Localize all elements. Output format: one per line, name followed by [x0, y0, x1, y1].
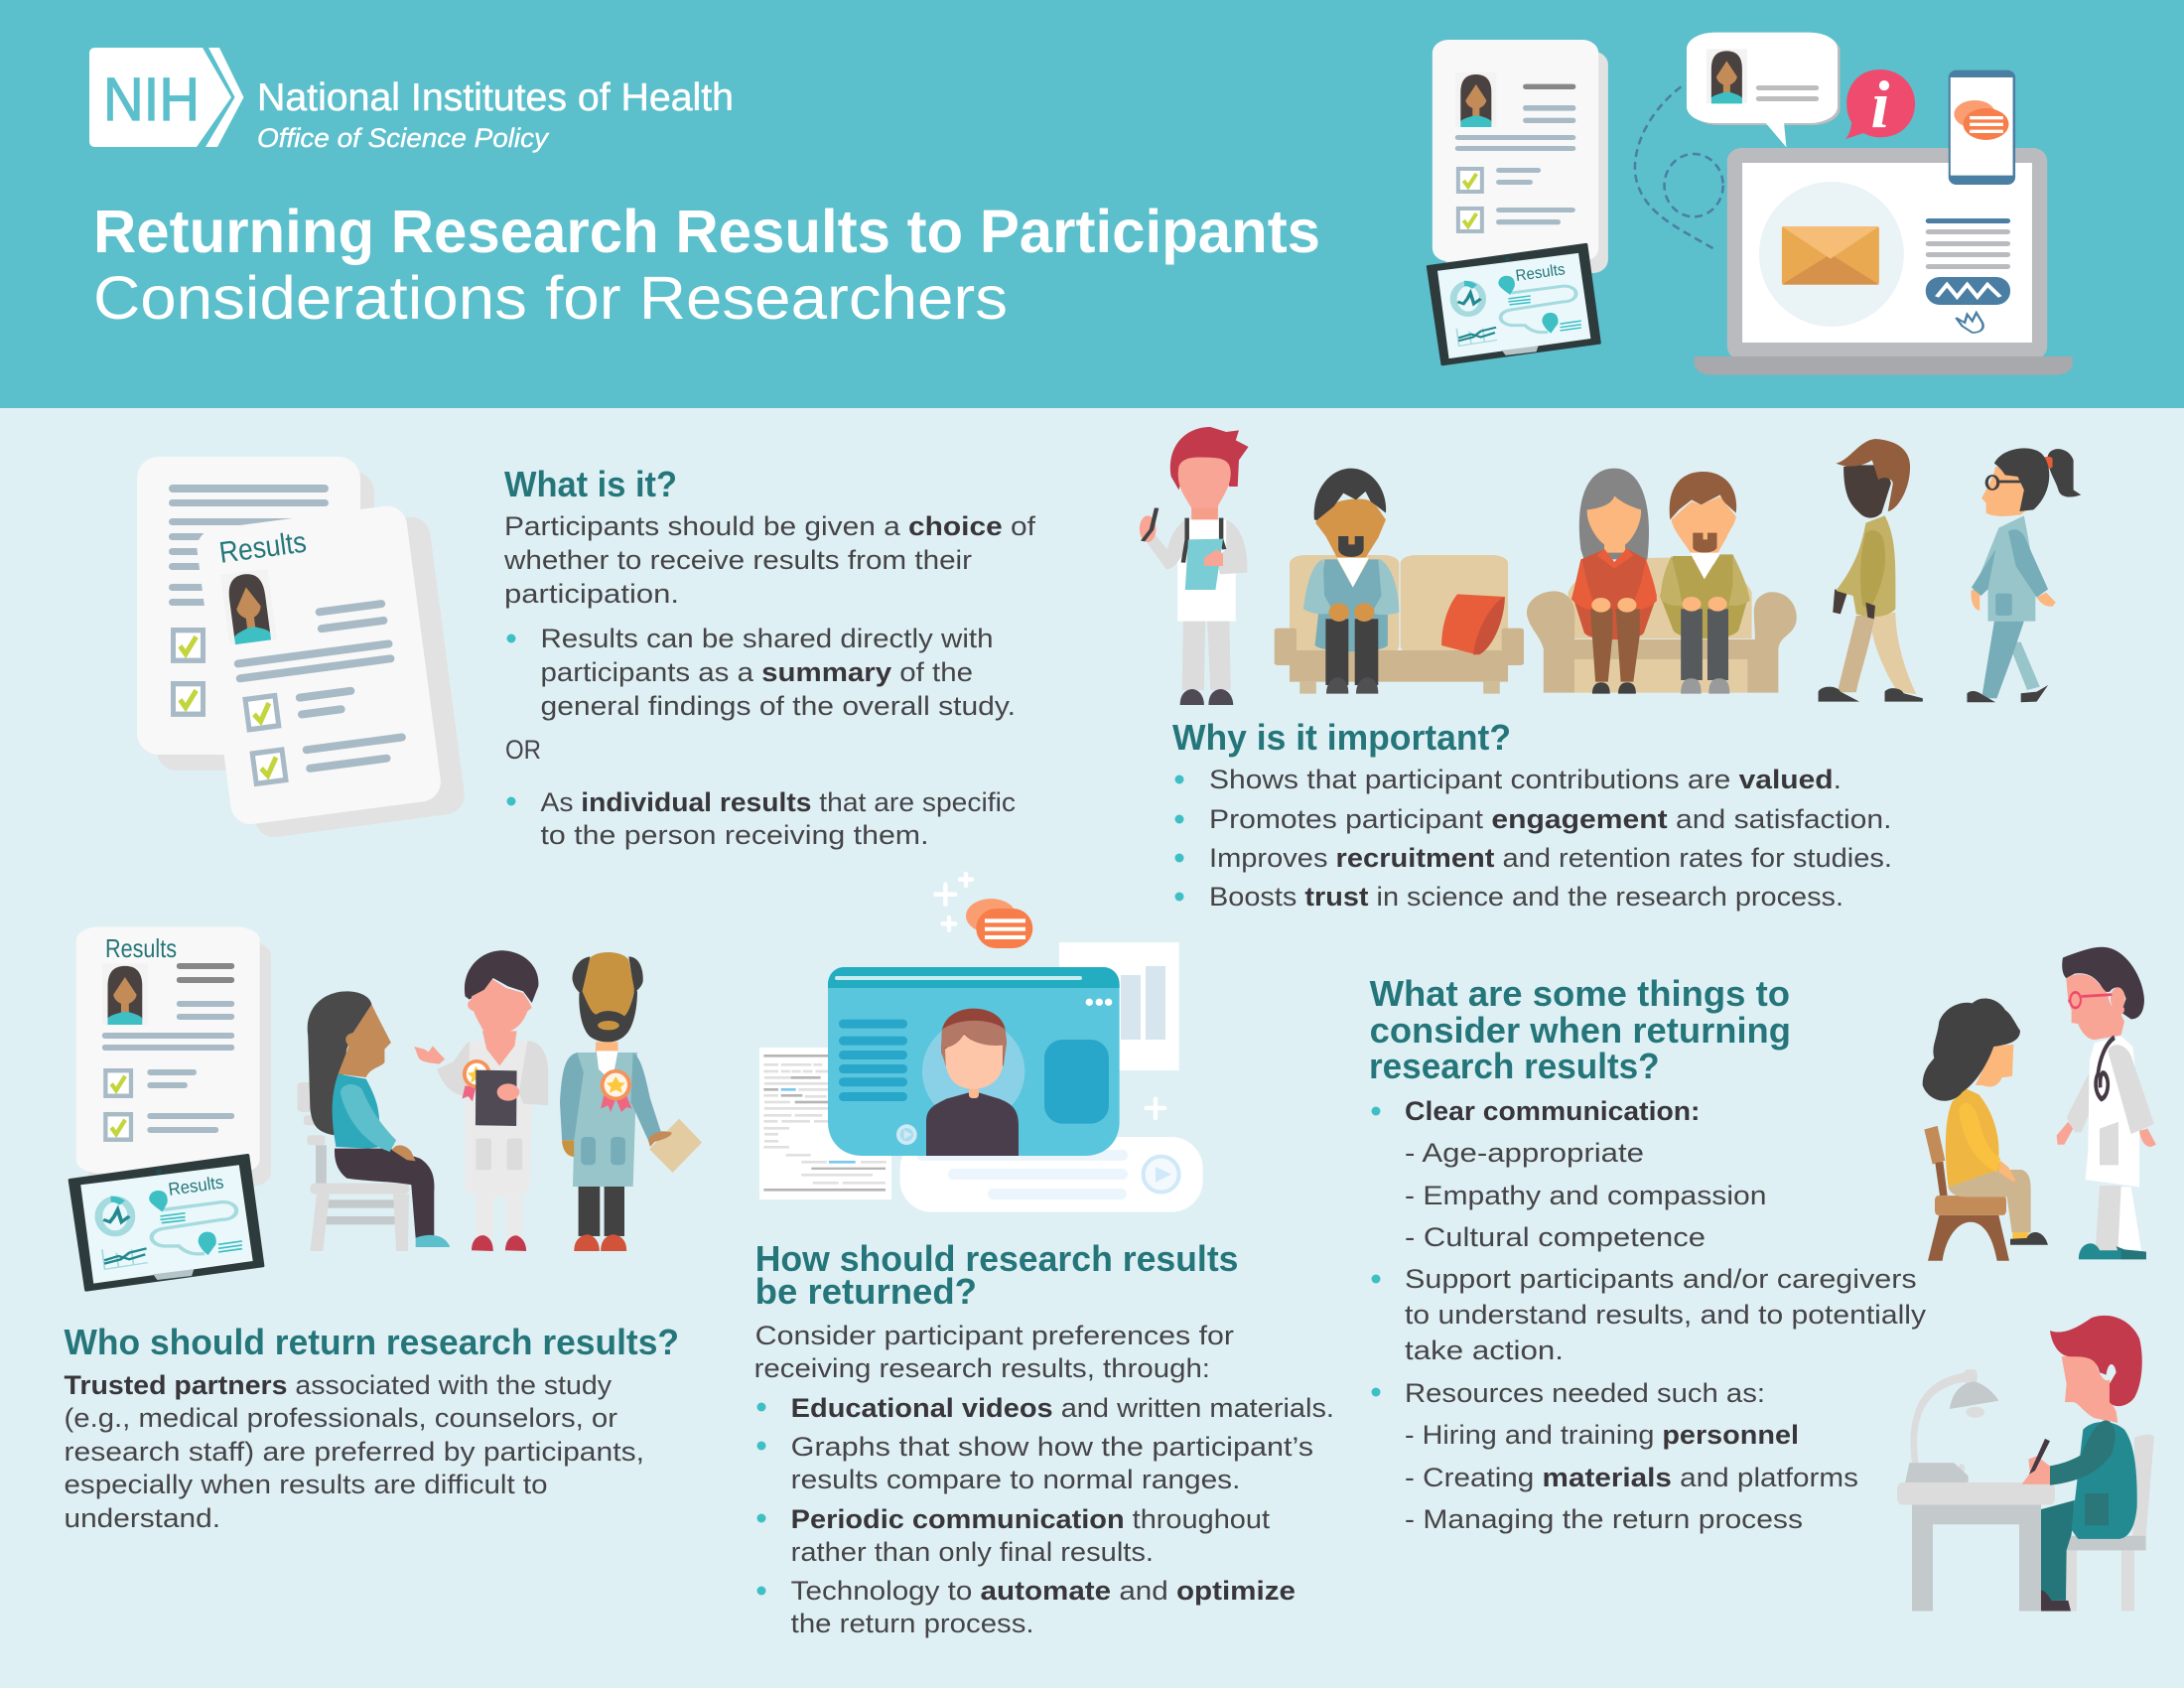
- text block: who should return: especially when results are difficult to: [64, 1470, 548, 1499]
- illustration: couch with seated man: [1275, 469, 1524, 694]
- icon: pink info bubble: i: [1871, 67, 1890, 142]
- heading: how should results be returned: How should research results: [755, 1238, 1239, 1279]
- text block: how should results be returned: Consider participant preferences for: [755, 1321, 1234, 1350]
- illustration: seated participant on chair: [297, 991, 450, 1251]
- text block: who should return: understand.: [64, 1503, 220, 1533]
- text block: who should return: Trusted partners associated with the study: [64, 1370, 613, 1400]
- header band: [0, 0, 2184, 408]
- text block: how should results be returned: the return process.: [791, 1609, 1034, 1638]
- illustration: results papers: Results: [217, 526, 309, 570]
- text block: how should results be returned: Graphs that show how the participant’s: [791, 1432, 1313, 1462]
- text block: why is it important: [1175, 765, 1892, 912]
- text block: what to consider: - Age-appropriate: [1405, 1138, 1644, 1168]
- heading: what to consider: What are some things to: [1370, 973, 1790, 1014]
- NIH logo: NIH: [103, 66, 200, 133]
- text block: what to consider: [1372, 1096, 1927, 1534]
- illustration: walking woman in scrubs: [1967, 448, 2081, 702]
- text block: what is it: Participants should be given a choice of: [504, 511, 1036, 541]
- icon: results tablet in header: [1428, 244, 1599, 364]
- text block: why is it important: Promotes participant engagement and satisfaction.: [1209, 804, 1892, 834]
- icon: results paper in header: [1433, 40, 1608, 273]
- text block: what to consider: - Cultural competence: [1405, 1222, 1706, 1252]
- text block: how should results be returned: [754, 1321, 1334, 1638]
- icon: laptop with envelope, bubble and phone: [1635, 33, 2073, 375]
- icon: results tablet, lower left: Results: [167, 1172, 225, 1199]
- heading: what to consider: [1369, 973, 1791, 1086]
- text block: what to consider: - Hiring and training personnel: [1405, 1420, 1799, 1450]
- text block: what is it: [503, 511, 1036, 850]
- text block: what is it: participation.: [504, 579, 679, 609]
- icon: results tablet in header: Results: [1515, 261, 1567, 285]
- text block: how should results be returned: Educational videos and written materials.: [791, 1393, 1334, 1423]
- text block: how should results be returned: Technology to automate and optimize: [791, 1576, 1296, 1606]
- illustration: bald researcher with folder: [560, 952, 702, 1251]
- text block: who should return: [64, 1370, 644, 1533]
- text block: what is it: Results can be shared directly with: [540, 624, 993, 653]
- heading: why is it important: Why is it important?: [1172, 717, 1511, 758]
- NIH logo: Office of Science Policy: [257, 123, 550, 153]
- text block: what to consider: - Creating materials and platforms: [1405, 1463, 1858, 1492]
- text block: what to consider: - Empathy and compassion: [1405, 1181, 1767, 1210]
- text block: who should return: (e.g., medical professionals, counselors, or: [64, 1403, 617, 1433]
- heading: what to consider: research results?: [1369, 1046, 1660, 1086]
- heading: who should return: Who should return research results?: [64, 1322, 679, 1362]
- icon: pink info bubble: [1845, 67, 1915, 142]
- text block: why is it important: Improves recruitment and retention rates for studies.: [1209, 843, 1892, 873]
- text block: what to consider: take action.: [1405, 1336, 1564, 1365]
- text block: what to consider: Resources needed such as:: [1405, 1378, 1765, 1408]
- illustration: researcher writing at desk: [1897, 1316, 2154, 1611]
- illustration: doctor with stethoscope: [2057, 947, 2156, 1259]
- illustration: walking man: [1819, 439, 1923, 702]
- illustration: woman seated on wooden chair: [1923, 998, 2048, 1261]
- text block: what to consider: - Managing the return process: [1405, 1504, 1803, 1534]
- text block: who should return: research staff) are preferred by participants,: [64, 1437, 644, 1467]
- text block: what to consider: Clear communication:: [1405, 1096, 1700, 1126]
- text block: what is it: As individual results that are specific: [540, 787, 1016, 817]
- illustration: results paper, lower left: Results: [105, 933, 177, 963]
- illustration: researcher in lab coat with tablet: [414, 950, 548, 1251]
- text block: what is it: whether to receive results from their: [503, 545, 972, 575]
- illustration: video screen with media cards: [759, 874, 1203, 1212]
- text block: how should results be returned: results compare to normal ranges.: [791, 1465, 1240, 1494]
- illustration: results papers: [137, 457, 467, 842]
- text block: why is it important: Boosts trust in science and the research process.: [1209, 882, 1843, 912]
- heading: how should results be returned: [755, 1238, 1239, 1312]
- NIH logo: National Institutes of Health: [257, 76, 734, 119]
- illustration: results paper, lower left: [76, 926, 271, 1187]
- text block: what is it: OR: [505, 735, 541, 765]
- text block: why is it important: Shows that participant contributions are valued .: [1209, 765, 1842, 794]
- illustration: armchair with seated couple: [1527, 469, 1797, 694]
- text block: what is it: participants as a summary of the: [540, 657, 973, 687]
- text block: how should results be returned: receiving research results, through:: [754, 1353, 1210, 1383]
- illustration: doctor with clipboard: [1140, 427, 1249, 705]
- subtitle: Considerations for Researchers: [93, 264, 1008, 332]
- heading: how should results be returned: be returned?: [755, 1271, 977, 1312]
- text block: what to consider: to understand results, and to potentially: [1405, 1300, 1927, 1330]
- text block: what is it: to the person receiving them.: [540, 820, 929, 850]
- text block: what is it: general findings of the overall study.: [540, 691, 1016, 721]
- icon: results tablet, lower left: [69, 1155, 263, 1290]
- text block: how should results be returned: rather than only final results.: [791, 1537, 1154, 1567]
- text block: what to consider: Support participants and/or caregivers: [1405, 1264, 1917, 1294]
- heading: what to consider: consider when returning: [1370, 1010, 1791, 1051]
- NIH logo: [89, 48, 734, 153]
- title: Returning Research Results to Participants: [93, 198, 1320, 265]
- heading: what is it: What is it?: [504, 464, 677, 504]
- text block: how should results be returned: Periodic communication throughout: [791, 1504, 1271, 1534]
